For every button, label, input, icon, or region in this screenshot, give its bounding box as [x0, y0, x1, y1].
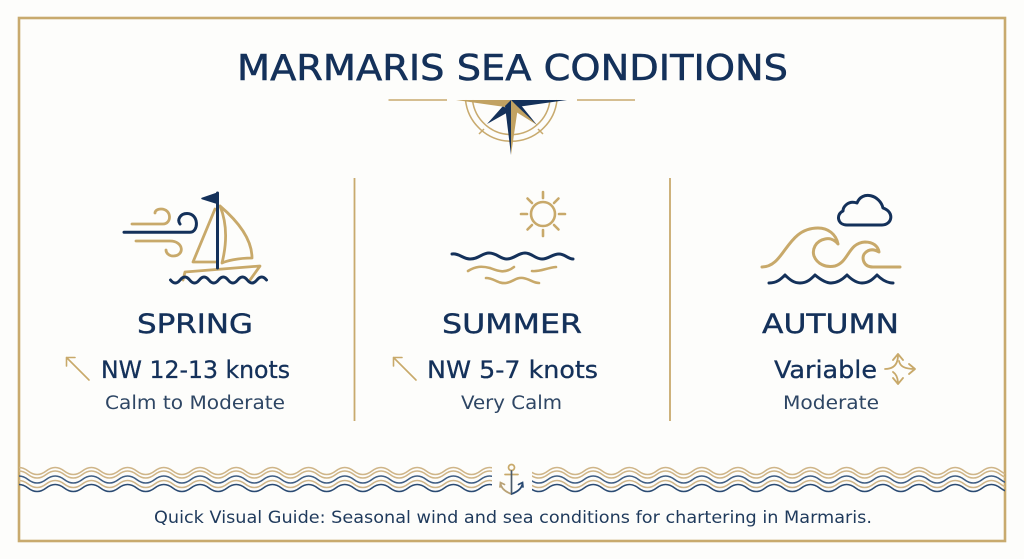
- panel: summer: [394, 192, 598, 414]
- compass emblem: [388, 100, 635, 155]
- footer caption: Quick Visual Guide: Seasonal wind and sea conditions for chartering in Marmaris.: [154, 508, 872, 527]
- wave band: right: [532, 466, 1005, 492]
- season heading: autumn: AUTUMN: [762, 309, 899, 340]
- icon: anchor: [500, 464, 523, 494]
- sea state: autumn: Moderate: [783, 393, 879, 414]
- panel: spring: [66, 193, 290, 414]
- column dividers: [354, 178, 670, 421]
- wind speed: autumn: Variable: [774, 356, 877, 384]
- sea state: spring: Calm to Moderate: [105, 393, 285, 414]
- panel: autumn: [762, 195, 915, 414]
- season heading: spring: SPRING: [137, 309, 253, 340]
- wind speed: spring: NW 12-13 knots: [101, 356, 290, 384]
- icon: sun over calm water: [452, 192, 573, 283]
- icon: northwest wind arrow: [66, 358, 89, 380]
- sea state: summer: Very Calm: [461, 393, 562, 414]
- icon: variable wind arrows: [885, 354, 915, 384]
- icon: cloud and breaking waves: [762, 195, 900, 283]
- icon: sailboat with wind: [124, 193, 267, 283]
- wind speed: summer: NW 5-7 knots: [427, 356, 598, 384]
- title: MARMARIS SEA CONDITIONS: [237, 48, 788, 89]
- season heading: summer: SUMMER: [442, 309, 582, 340]
- wave band: left: [19, 466, 492, 492]
- icon: northwest wind arrow: [394, 358, 416, 380]
